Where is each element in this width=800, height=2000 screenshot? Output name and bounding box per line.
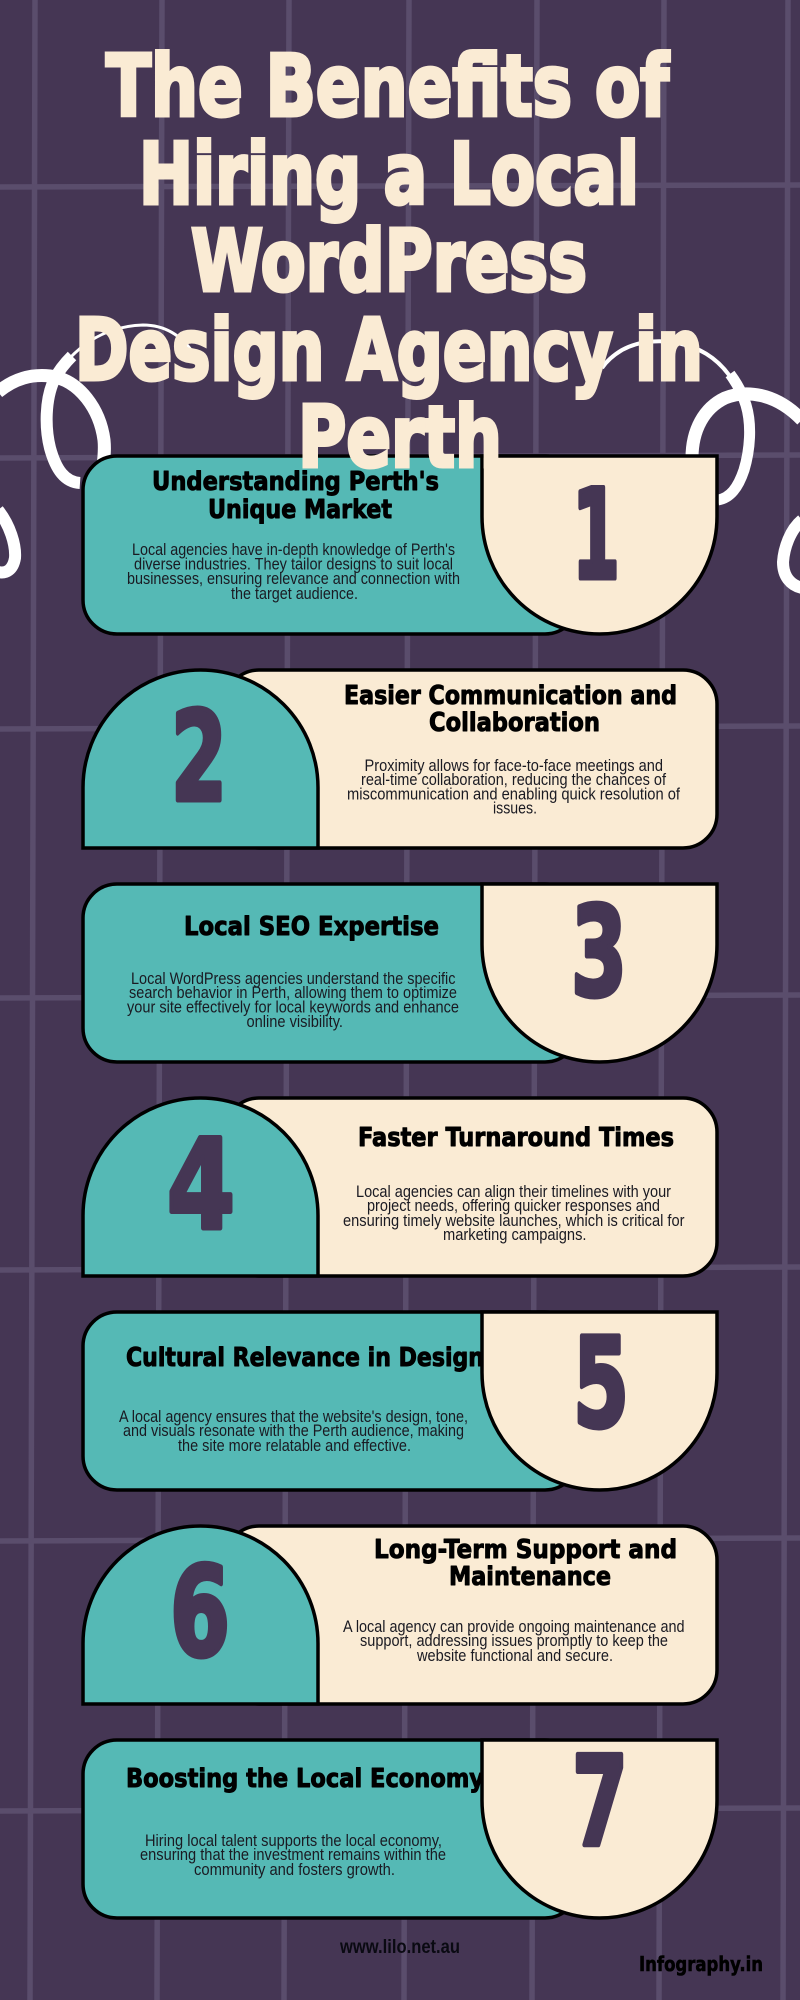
card 2 body text: issues. — [493, 800, 537, 818]
card 6 heading — [374, 1535, 677, 1592]
card 6 body text: A local agency can provide ongoing maintenance and — [343, 1618, 684, 1636]
card 1 body text: businesses, ensuring relevance and connection with — [127, 570, 460, 588]
panel: card 1 — [83, 456, 717, 634]
card 7 body text: Hiring local talent supports the local economy, — [145, 1832, 442, 1850]
card 1 body text — [127, 541, 460, 603]
card 5 body text: and visuals resonate with the Perth audience, making — [123, 1422, 464, 1440]
card 2 body text: miscommunication and enabling quick resolution of — [347, 786, 680, 804]
decoration: right white squiggles — [602, 341, 800, 588]
card 2 body text: Proximity allows for face-to-face meetings and — [364, 757, 663, 775]
card 2 number arch — [83, 670, 318, 848]
card 3 body text — [127, 970, 459, 1031]
card 4 body text — [343, 1183, 685, 1244]
number 4: 4 — [167, 1114, 235, 1258]
panel: card 3 — [83, 881, 717, 1062]
card 3 body text: search behavior in Perth, allowing them to optimize — [129, 984, 457, 1002]
number 3: 3 — [571, 881, 627, 1025]
card 3 base — [83, 884, 579, 1062]
number 5: 5 — [573, 1312, 629, 1456]
panel: card 4 — [83, 1098, 717, 1276]
card 6 body text — [343, 1618, 684, 1665]
card 1 base — [83, 456, 579, 634]
card 6 number arch — [83, 1526, 318, 1704]
card 4 body text: ensuring timely website launches, which is critical for — [343, 1212, 685, 1230]
card 4 base — [225, 1098, 717, 1276]
card 6 heading: Maintenance — [449, 1562, 611, 1592]
card 7 base — [83, 1740, 579, 1918]
title: WordPress — [191, 212, 587, 312]
panel: card 7 — [83, 1731, 717, 1918]
card 4 heading: Faster Turnaround Times — [358, 1123, 674, 1153]
card 1 number shield — [482, 456, 717, 634]
decoration: left white squiggles — [0, 325, 194, 572]
footer: credit: Infography.in — [639, 1952, 763, 1976]
card 3 number shield — [482, 884, 717, 1062]
card 2 body text: real-time collaboration, reducing the chances of — [361, 771, 666, 789]
card 2 body text — [347, 757, 680, 818]
card 7 body text — [140, 1832, 446, 1879]
panel: card 5 — [83, 1312, 717, 1490]
card 4 body text: project needs, offering quicker responses and — [367, 1197, 660, 1215]
title — [75, 38, 703, 488]
card 6 base — [225, 1526, 717, 1704]
card 1 body text: Local agencies have in-depth knowledge of Perth's — [132, 541, 455, 559]
card 7 body text: community and fosters growth. — [194, 1861, 395, 1879]
card 3 body text: your site effectively for local keywords and enhance — [127, 998, 459, 1016]
card 3 heading: Local SEO Expertise — [184, 912, 439, 942]
panel: card 6 — [83, 1526, 717, 1704]
card 6 body text: website functional and secure. — [416, 1647, 613, 1665]
card 2 base — [225, 670, 717, 848]
card 3 body text: Local WordPress agencies understand the specific — [131, 970, 456, 988]
number 6: 6 — [170, 1541, 230, 1685]
number 7: 7 — [572, 1731, 628, 1875]
card 5 body text: A local agency ensures that the website's design, tone, — [119, 1408, 468, 1426]
footer: website url: www.lilo.net.au — [339, 1937, 460, 1958]
card 4 number arch — [83, 1098, 318, 1276]
card 6 body text: support, addressing issues promptly to keep the — [360, 1632, 668, 1650]
card 1 heading: Unique Market — [208, 495, 392, 525]
card 4 body text: Local agencies can align their timelines with your — [356, 1183, 671, 1201]
number 1: 1 — [572, 464, 620, 608]
card 5 number shield — [482, 1312, 717, 1490]
card 2 heading — [344, 681, 677, 738]
title: Perth — [298, 388, 502, 488]
card 2 heading: Collaboration — [429, 708, 600, 738]
card 7 number shield — [482, 1740, 717, 1918]
number 2: 2 — [171, 686, 227, 830]
card 5 base — [83, 1312, 579, 1490]
card 6 heading: Long-Term Support and — [374, 1535, 677, 1565]
panel: card 2 — [83, 670, 717, 848]
card 2 heading: Easier Communication and — [344, 681, 677, 711]
card 5 heading: Cultural Relevance in Design — [126, 1343, 484, 1373]
card 5 body text — [119, 1408, 468, 1455]
card 5 body text: the site more relatable and effective. — [178, 1437, 411, 1455]
card 1 heading: Understanding Perth's — [152, 467, 439, 497]
card 3 body text: online visibility. — [246, 1013, 343, 1031]
card 1 body text: diverse industries. They tailor designs to suit local — [134, 556, 453, 574]
card 7 heading: Boosting the Local Economy — [126, 1764, 484, 1794]
title: Hiring a Local — [139, 126, 639, 224]
card 1 heading — [152, 467, 439, 525]
card 7 body text: ensuring that the investment remains within the — [140, 1846, 446, 1864]
card 4 body text: marketing campaigns. — [443, 1226, 586, 1244]
card 1 body text: the target audience. — [231, 585, 358, 603]
